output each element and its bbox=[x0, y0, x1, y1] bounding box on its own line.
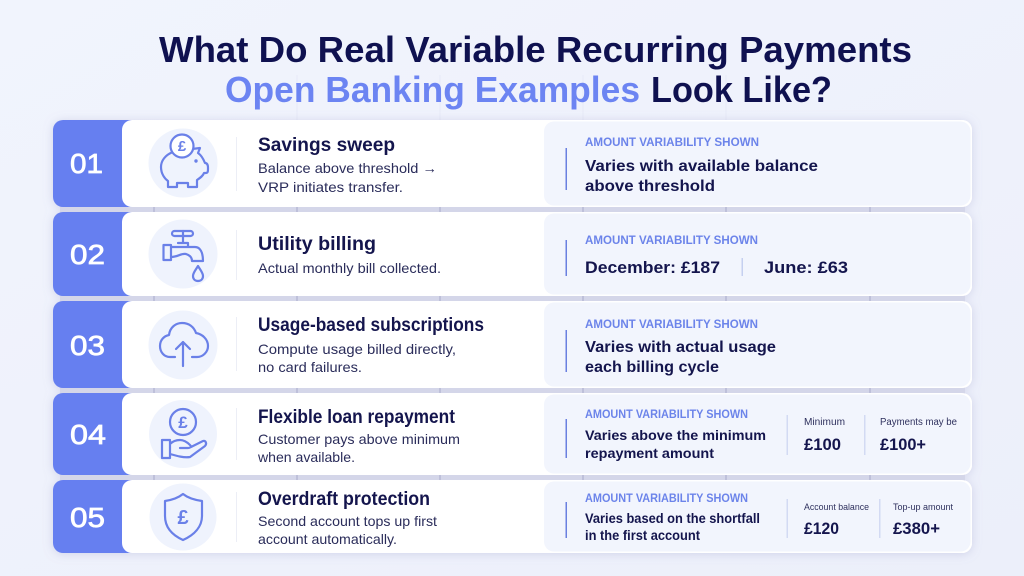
number 05: 05 bbox=[70, 502, 105, 533]
utility billing text: Utility billing bbox=[258, 234, 376, 255]
icon: piggy bank bbox=[148, 128, 218, 198]
flexible loan repayment text: Flexible loan repayment bbox=[258, 407, 456, 428]
icon: piggy bank: £ bbox=[178, 138, 187, 155]
title: Open Banking Examples bbox=[225, 69, 640, 110]
icon: tap bbox=[148, 220, 218, 288]
amount variability 03: Varies with actual usage bbox=[585, 339, 776, 356]
overdraft protection text bbox=[258, 489, 437, 547]
stat: minimum bbox=[804, 417, 845, 454]
row 05: overdraft protection bbox=[53, 480, 972, 553]
icon: cloud upload bbox=[148, 310, 218, 380]
stat: payments may be: Payments may be bbox=[880, 417, 957, 428]
usage-based subscriptions text: Compute usage billed directly, bbox=[258, 341, 456, 357]
amount variability 04 bbox=[585, 409, 766, 461]
stat: payments may be bbox=[880, 417, 957, 454]
amount variability 01 bbox=[585, 137, 818, 195]
utility billing text bbox=[258, 234, 441, 276]
number 03: 03 bbox=[70, 330, 105, 361]
title: Look Like? bbox=[651, 69, 832, 110]
overdraft protection text: account automatically. bbox=[258, 531, 397, 547]
stat: account balance: £120 bbox=[804, 519, 839, 538]
usage-based subscriptions text bbox=[258, 315, 484, 375]
overdraft protection text: Second account tops up first bbox=[258, 513, 437, 529]
flexible loan repayment text: when available. bbox=[257, 449, 355, 465]
overdraft protection text: Overdraft protection bbox=[258, 489, 430, 510]
usage-based subscriptions text: no card failures. bbox=[258, 359, 362, 375]
amount variability 04: AMOUNT VARIABILITY SHOWN bbox=[585, 409, 748, 421]
stat: top-up amount bbox=[893, 502, 953, 538]
row 02: utility billing bbox=[53, 212, 972, 296]
amount variability 05 bbox=[585, 493, 760, 543]
amount variability 04: Varies above the minimum bbox=[585, 427, 766, 443]
stat: minimum: Minimum bbox=[804, 417, 845, 428]
number 04: 04 bbox=[70, 419, 106, 450]
flexible loan repayment text bbox=[257, 407, 460, 465]
icon: hand with coin bbox=[149, 400, 217, 468]
amount variability 02: June: £63 bbox=[764, 258, 848, 277]
icon: shield with pound: £ bbox=[177, 507, 189, 529]
amount variability 01: AMOUNT VARIABILITY SHOWN bbox=[585, 137, 759, 149]
stat: minimum: £100 bbox=[804, 435, 841, 454]
amount variability 01: Varies with available balance bbox=[585, 158, 818, 175]
title: What Do Real Variable Recurring Payments bbox=[159, 29, 912, 70]
flexible loan repayment text: Customer pays above minimum bbox=[258, 431, 460, 447]
amount variability 03: each billing cycle bbox=[585, 359, 719, 376]
amount variability 01: above threshold bbox=[585, 178, 715, 195]
amount variability 03 bbox=[585, 319, 776, 376]
amount variability 05: AMOUNT VARIABILITY SHOWN bbox=[585, 493, 748, 505]
row 04: flexible loan repayment bbox=[53, 393, 972, 475]
amount variability 05: Varies based on the shortfall bbox=[585, 510, 760, 526]
stat: account balance: Account balance bbox=[804, 502, 869, 512]
amount variability 04: repayment amount bbox=[585, 445, 714, 461]
icon: hand with coin: £ bbox=[178, 413, 188, 432]
number 01: 01 bbox=[70, 148, 103, 179]
amount variability 02 bbox=[585, 235, 848, 277]
utility billing text: Actual monthly bill collected. bbox=[258, 260, 441, 276]
stat: top-up amount: £380+ bbox=[893, 519, 940, 538]
title bbox=[159, 29, 912, 110]
stat: payments may be: £100+ bbox=[880, 435, 926, 454]
usage-based subscriptions text: Usage-based subscriptions bbox=[258, 315, 484, 336]
amount variability 02: AMOUNT VARIABILITY SHOWN bbox=[585, 235, 758, 247]
amount variability 05: in the first account bbox=[585, 527, 700, 543]
savings sweep text: Savings sweep bbox=[258, 135, 395, 156]
card shadows bbox=[53, 120, 972, 553]
savings sweep text bbox=[258, 135, 437, 195]
icon: shield with pound bbox=[150, 484, 216, 550]
row 03: usage-based subscriptions bbox=[53, 301, 972, 388]
row 01: savings sweep bbox=[53, 120, 972, 207]
savings sweep text: Balance above threshold → bbox=[258, 160, 437, 176]
number 02: 02 bbox=[70, 239, 105, 270]
stat: top-up amount: Top-up amount bbox=[893, 502, 953, 512]
stat: account balance bbox=[804, 502, 869, 538]
savings sweep text: VRP initiates transfer. bbox=[258, 179, 403, 195]
amount variability 03: AMOUNT VARIABILITY SHOWN bbox=[585, 319, 758, 331]
amount variability 02: December: £187 bbox=[585, 258, 720, 277]
